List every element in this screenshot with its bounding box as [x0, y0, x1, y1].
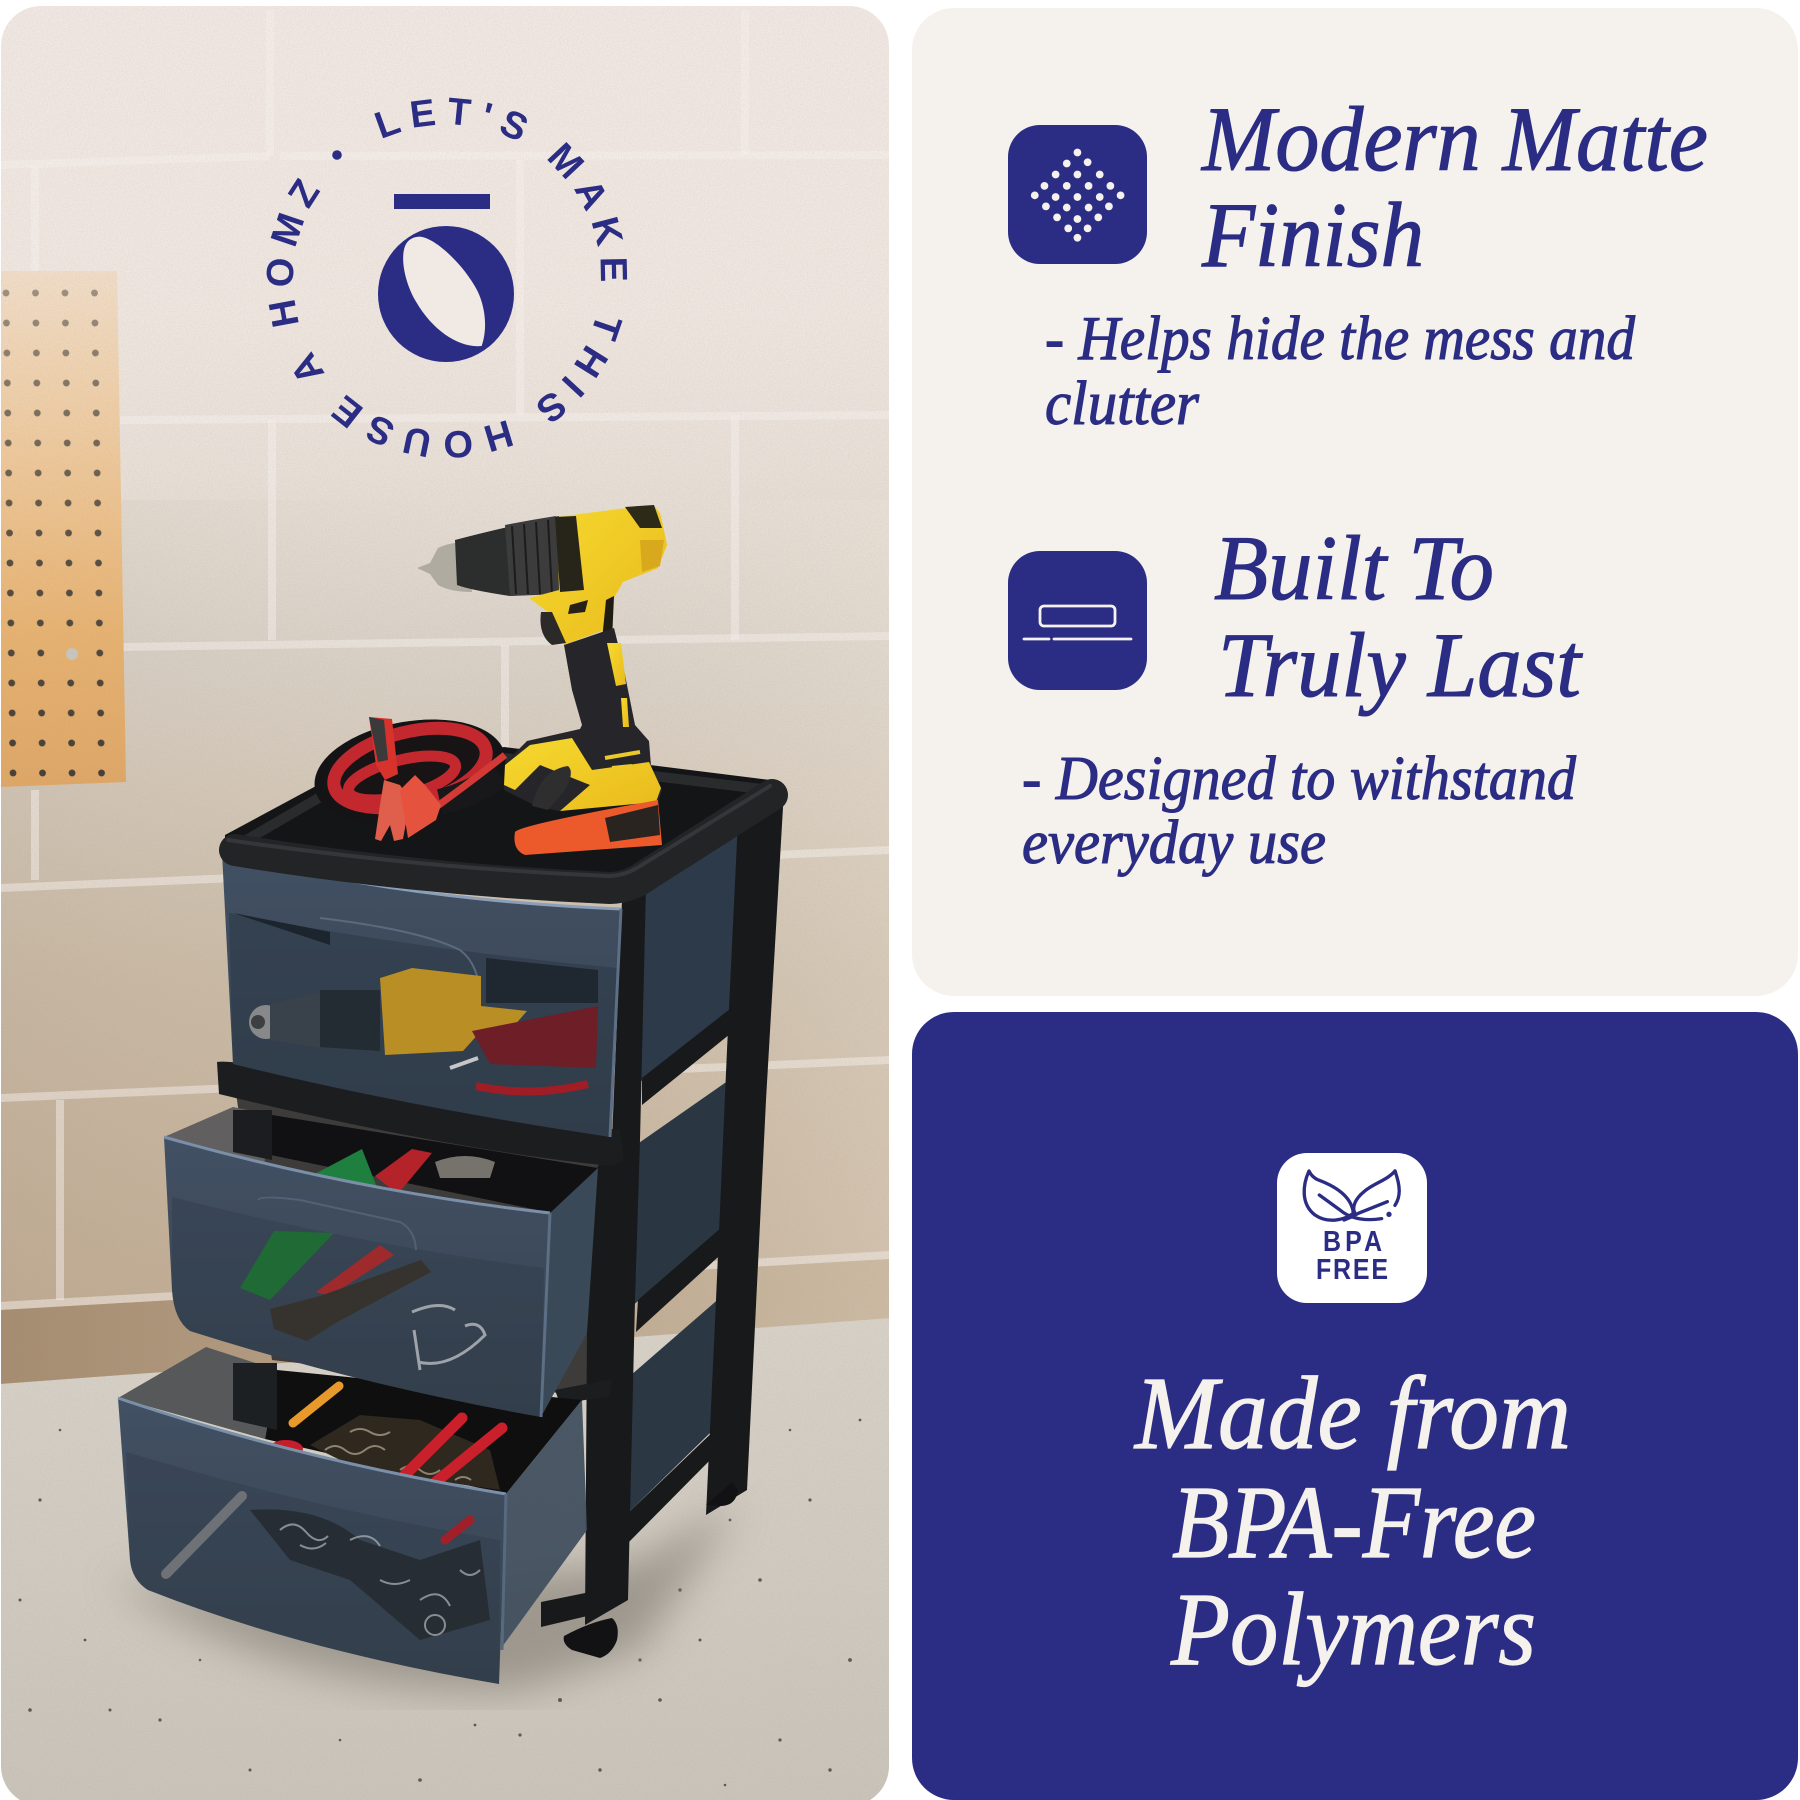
- icon: dotted diamond: [1008, 125, 1147, 264]
- text: durability description: everyday use: [1022, 809, 1326, 877]
- side panels: [625, 832, 742, 1516]
- heading: Made from BPA-Free Polymers: BPA-Free: [1172, 1465, 1536, 1580]
- orange handle: [293, 1386, 339, 1423]
- wall: [0, 0, 890, 1400]
- drawer 2 (middle, open): [164, 1107, 598, 1417]
- logo: circular tagline: LET'S MAKE THIS HOUSE A HOMZ: [266, 98, 628, 458]
- panel: BPA free: [912, 1012, 1798, 1800]
- text: durability description: - Designed to withstand: [1022, 745, 1577, 813]
- logo: O mark: [378, 226, 514, 362]
- drawer 1 (top, closed): [222, 853, 621, 1137]
- front: [118, 1398, 506, 1684]
- pegboard: [0, 271, 126, 787]
- panel: product photo: [0, 0, 890, 1800]
- heading: Made from BPA-Free Polymers: Polymers: [1170, 1572, 1536, 1687]
- drill: [417, 505, 667, 855]
- floor: [0, 1259, 890, 1800]
- text: finish description: [1045, 305, 1636, 438]
- text: finish description: - Helps hide the mess and: [1045, 305, 1636, 373]
- wall and floor texture: [0, 0, 890, 1800]
- heading: Made from BPA-Free Polymers: Made from: [1133, 1356, 1571, 1471]
- red handles: [398, 1418, 502, 1490]
- heading: Modern Matte Finish: Modern Matte: [1200, 88, 1708, 190]
- jumper cables: [311, 711, 509, 841]
- lid: [225, 747, 776, 890]
- heading: Made from BPA-Free Polymers: [1133, 1356, 1571, 1687]
- text: durability description: [1022, 745, 1577, 877]
- heading: Modern Matte Finish: [1200, 88, 1708, 286]
- text: finish description: clutter: [1045, 370, 1200, 438]
- cabinet back: [236, 1098, 599, 1393]
- heading: Built To Truly Last: Built To: [1214, 517, 1494, 619]
- icon: BPA free badge: [1277, 1153, 1427, 1303]
- floor shadow: [110, 1500, 740, 1691]
- logo: macron bar: [394, 194, 490, 209]
- drawer 3 (bottom, open): [118, 1347, 587, 1684]
- heading: Built To Truly Last: [1214, 517, 1583, 716]
- heading: Built To Truly Last: Truly Last: [1218, 614, 1583, 716]
- icon: BPA free badge: BPA: [1323, 1224, 1382, 1257]
- tools through plastic: [166, 1496, 242, 1574]
- icon: durable drawer: [1008, 551, 1147, 690]
- wheels: [564, 1482, 738, 1658]
- chain pile: [310, 1415, 500, 1490]
- side: [502, 1400, 587, 1647]
- storage unit frame: [217, 790, 784, 1658]
- heading: Modern Matte Finish: Finish: [1201, 184, 1424, 286]
- panel: features: [912, 8, 1798, 996]
- icon: BPA free badge: FREE: [1316, 1252, 1388, 1285]
- shelf rails: [217, 1062, 624, 1404]
- black posts and rails: [541, 790, 784, 1627]
